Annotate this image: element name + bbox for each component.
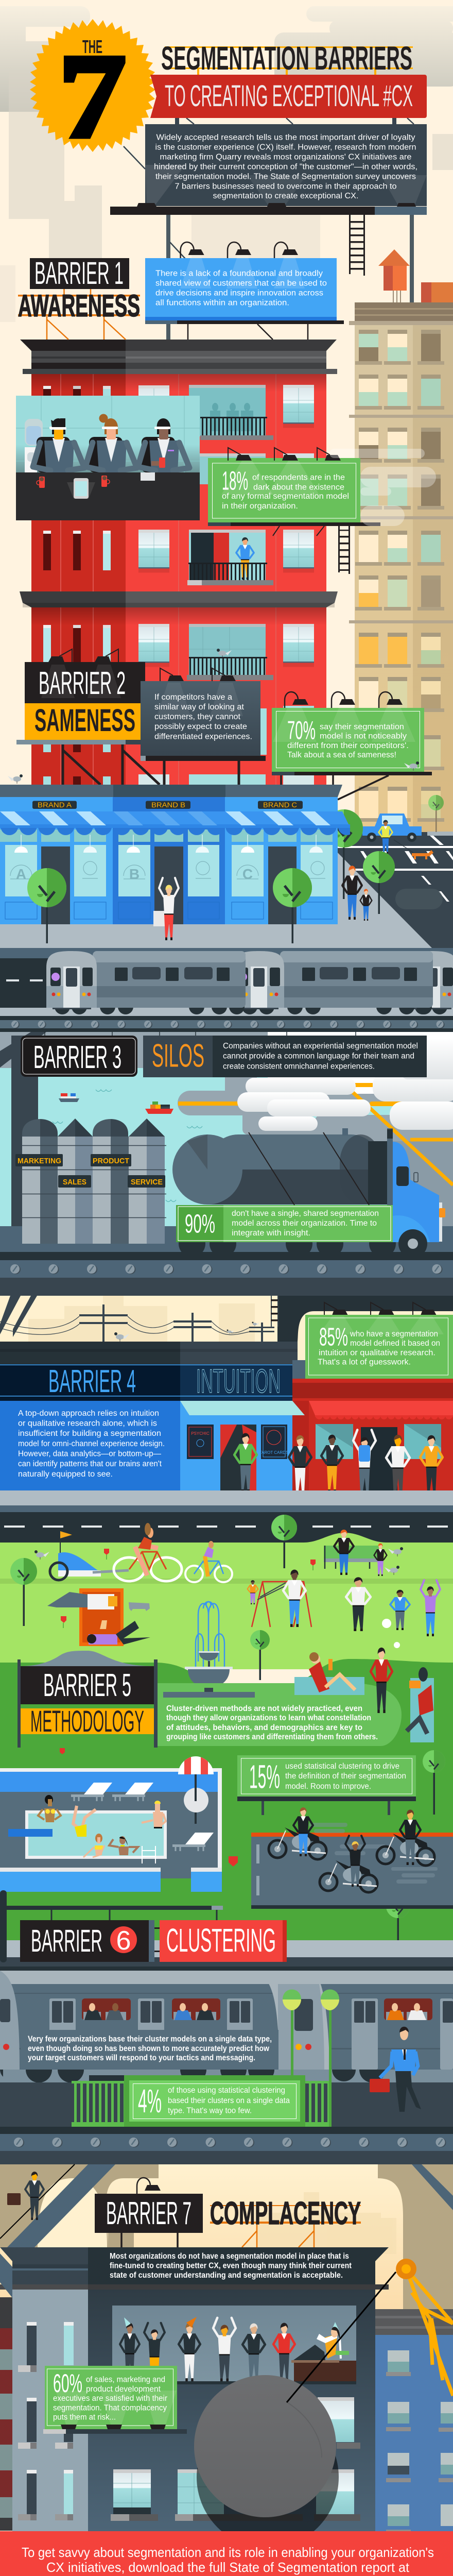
marketing label	[15, 1154, 63, 1166]
stat billboard: 70%	[272, 692, 432, 800]
clustering sign	[160, 1920, 287, 1962]
psychic poster	[187, 1425, 214, 1459]
barrier 5 text panel	[158, 1683, 402, 1746]
barrier 3 sign: BARRIER 3	[33, 1040, 121, 1075]
stat panel: 15%: the definition of their segmentation	[285, 1772, 406, 1781]
sales label: SALES	[63, 1178, 86, 1187]
barrier 6 text panel: your target customers will respond to your tactics and messaging.	[28, 2054, 255, 2062]
marketing label: MARKETING	[18, 1157, 61, 1165]
stat panel: 4%: of those using statistical clustering	[168, 2086, 285, 2095]
road and crossing	[0, 832, 453, 956]
stat billboard: 18%: in their organization.	[222, 502, 298, 511]
store roof and brand signs	[0, 785, 342, 811]
product label	[91, 1154, 131, 1166]
fountain	[185, 1602, 233, 1692]
wrecking ball shadow	[197, 2406, 339, 2548]
barrier 6 text panel: Very few organizations base their cluster models on a single data type,	[28, 2035, 272, 2043]
complacency building: fine-tuned to creating better CX, even though many think their current	[110, 2262, 352, 2270]
barrier 2 text billboard: If competitors have a	[154, 693, 232, 702]
brand A sign	[32, 801, 77, 809]
barrier 5 text panel: grouping like customers and differentiating them from others.	[166, 1733, 378, 1741]
barrier 2 text billboard: similar way of looking at	[154, 703, 245, 711]
intro billboard: 7 barriers businesses need to overcome in their approach to	[175, 182, 396, 191]
barrier 1 billboard: There is a lack of a foundational and broadly	[155, 269, 323, 278]
barrier 7 sign: BARRIER 7	[106, 2196, 191, 2231]
striped awning	[0, 811, 350, 836]
complacency sign: COMPLACENCY	[210, 2196, 361, 2231]
title: THE 7 starburst	[30, 19, 155, 163]
barrier 6 subway train	[0, 1971, 453, 2083]
tarot poster	[259, 1425, 288, 1459]
stat panel: 90%: model across their organization. Time to	[232, 1219, 377, 1228]
service label	[128, 1175, 165, 1188]
brand B sign	[146, 801, 190, 809]
sales label	[58, 1175, 91, 1188]
cyclists with trailer	[50, 1523, 232, 1582]
ships and waves	[53, 1090, 202, 1201]
stat billboard: 18%: of respondents are in the	[252, 473, 345, 482]
barrier 4 blue text panel: However, data analytics—or bottom-up—	[18, 1450, 161, 1458]
blindfolded executives	[33, 414, 189, 476]
crane	[396, 2259, 453, 2396]
stat panel: 60%	[43, 2366, 187, 2531]
red building windows and balconies	[43, 385, 314, 786]
barrier 3 sign	[21, 1036, 137, 1077]
barrier 6 street backdrop	[0, 1890, 453, 1971]
party guests	[120, 2318, 295, 2381]
barrier 4 blue text panel: A top-down approach relies on intuition	[18, 1409, 159, 1418]
silos panel: SILOS	[152, 1038, 204, 1074]
stat billboard: 70%: model is not noticeably	[320, 732, 407, 741]
reclining guest on desk	[293, 2327, 341, 2360]
stat panel: 60%: 60%	[53, 2369, 82, 2398]
blue car and dog walker	[362, 814, 433, 859]
barrier 2 sign: SAMENESS	[34, 703, 135, 738]
park trees	[10, 1515, 445, 1948]
stat panel: 15%	[237, 1755, 416, 1815]
intro billboard: hindered by their current conception of "the customer"—in other words,	[154, 162, 417, 171]
complacency building: Most organizations do not have a segmentation model in place that is	[110, 2252, 349, 2261]
barrier 1 billboard: all functions within an organization.	[155, 298, 289, 307]
stat panel: 4%: type. That's way too few.	[168, 2106, 252, 2115]
street skyline with utility poles	[0, 1296, 453, 1383]
barrier 2 sign: BARRIER 2	[39, 666, 126, 701]
stat panel: 60%: puts them at risk...	[53, 2413, 116, 2421]
barrier 1 sign: AWARENESS	[18, 289, 140, 323]
barrier 6 text panel: even though doing so has been shown to more accurately predict how	[28, 2044, 270, 2053]
lawn figures on blankets	[294, 1642, 434, 1742]
stat billboard: 18%	[208, 448, 380, 536]
barrier 2 sign	[16, 649, 160, 785]
water cooler	[25, 419, 43, 472]
fire ladder	[338, 526, 350, 574]
stat panel: 4%: 4%	[138, 2082, 162, 2120]
balcony man	[187, 537, 273, 585]
silos panel: create consistent omnichannel experiences.	[223, 1062, 375, 1071]
stat panel: 15%: 15%	[249, 1758, 280, 1795]
stat panel: 85%: 85%	[319, 1323, 348, 1351]
trees near the crossing	[325, 795, 444, 899]
commuter on the cable	[7, 2172, 44, 2220]
table items	[37, 472, 155, 499]
stat panel: 60%: segmentation. That complacency	[53, 2404, 167, 2412]
barrier 5 text panel: Cluster-driven methods are not widely practiced, even	[166, 1704, 362, 1713]
stat panel: 15%: model. Room to improve.	[285, 1782, 371, 1791]
right blue building	[375, 2309, 453, 2531]
silos panel: cannot provide a common language for their team and	[223, 1052, 414, 1060]
road smog clouds	[178, 1038, 453, 1185]
stat panel: 60%: product development	[86, 2385, 161, 2394]
building windows and ledges	[18, 2322, 360, 2521]
stat panel: 90%	[176, 1205, 393, 1242]
smog clouds	[0, 6, 453, 112]
businessman with briefcase	[370, 2027, 421, 2112]
stat billboard: 18%: of any formal segmentation model	[222, 492, 349, 501]
barrier 2 text billboard: customers, they cannot	[154, 713, 241, 721]
intro billboard	[110, 124, 427, 215]
dog by the blanket	[129, 1602, 150, 1611]
intro billboard: marketing firm Quarry reveals most organizations' CX initiatives are	[160, 152, 412, 161]
silos	[15, 1118, 166, 1244]
people outside the psychic	[234, 1430, 443, 1498]
barrier 3 scene backdrop	[0, 1020, 453, 1298]
umbrella and table	[178, 1754, 214, 1824]
stat panel: 60%: of sales, marketing and	[86, 2375, 165, 2384]
barrier 4 neon sign: BARRIER 4	[48, 1364, 136, 1399]
brand stores facade: A	[16, 866, 26, 882]
barrier 2 text billboard	[141, 668, 266, 785]
brand B sign: BRAND B	[151, 801, 185, 809]
pale city silhouette	[0, 70, 453, 322]
barrier 4 blue text panel	[0, 1401, 180, 1490]
platform, fence and green lamps	[0, 1990, 453, 2127]
barrier 5 sign: BARRIER 5	[43, 1668, 131, 1703]
brand stores facade: B	[129, 866, 140, 882]
tanker truck	[172, 1128, 445, 1258]
bench, swing and playing figures	[34, 1530, 440, 1636]
barrier 4 blue text panel: model for omni-channel experience design.	[18, 1439, 165, 1448]
brand A sign: BRAND A	[38, 801, 72, 809]
meeting room panel	[16, 396, 200, 520]
stat panel: 85%	[305, 1302, 453, 1383]
elevated road girder with bolts	[0, 1020, 453, 1296]
barrier 5 text panel: though they allow organizations to learn what constellation	[166, 1714, 371, 1722]
psychic store and red store	[0, 1342, 453, 1490]
tulips	[60, 1549, 316, 1874]
stat panel: 85%: who have a segmentation	[350, 1330, 438, 1338]
stat panel: 4%: based their clusters on a single data	[168, 2096, 290, 2105]
stat panel: 85%: model defined it based on	[350, 1339, 440, 1348]
barrier 1 billboard	[145, 242, 344, 340]
barrier 5 text panel: of attitudes, behaviors, and demographics are key to	[166, 1723, 362, 1732]
train window passengers	[82, 1998, 432, 2020]
stat billboard: 70%: 70%	[287, 716, 316, 745]
picnic blanket with people lying down	[47, 1588, 150, 1646]
pigeon on balcony and fourth-floor railing	[187, 649, 273, 680]
silos panel	[143, 1036, 427, 1077]
swimmers	[38, 1795, 166, 1863]
stat panel: 85%: That's a lot of guesswork.	[318, 1358, 411, 1366]
tarot poster: TAROT CARDS	[259, 1450, 288, 1455]
intro billboard: segmentation to create exceptional CX.	[213, 192, 358, 200]
complacency building	[0, 2247, 389, 2531]
barrier 1 sign: BARRIER 1	[34, 256, 124, 291]
stat billboard: 18%: dark about the existence	[253, 483, 344, 492]
water tower and rooftop box	[378, 249, 453, 302]
brand stores facade	[0, 827, 338, 924]
red building roof	[20, 340, 337, 374]
complacency building: state of customer understanding and segmentation is acceptable.	[110, 2271, 343, 2280]
brand stores facade: C	[242, 866, 253, 882]
subway tracks and train	[0, 948, 453, 1020]
psychic poster: PSYCHIC	[191, 1431, 210, 1436]
barrier 7 sky and arches	[0, 2164, 453, 2314]
swimming pool	[0, 1754, 222, 1892]
barrier 5 sign	[18, 1651, 158, 1748]
stat billboard: 70%: say their segmentation	[320, 723, 404, 732]
intro billboard: their segmentation model. The State of Segmentation survey uncovers	[155, 172, 416, 181]
barrier 4 blue text panel: naturally equipped to see.	[18, 1470, 113, 1479]
second girder with bolts	[0, 2127, 453, 2164]
call to action band	[0, 2531, 453, 2576]
billboard structure: poles, ladder and struts	[124, 118, 414, 340]
wrecking ball and cable	[194, 2272, 396, 2517]
stat panel: 85%: intuition or qualitative research.	[319, 1349, 435, 1357]
stat panel: 15%: used statistical clustering to drive	[285, 1762, 399, 1771]
title banner: To Creating Exceptional #CX	[150, 75, 427, 118]
intro billboard: is the customer experience (CX) itself. However, research from modern	[155, 143, 416, 151]
barrier 7 sign	[95, 2178, 203, 2247]
barrier 1 billboard: shared view of customers that can be used to	[155, 279, 327, 287]
pigeon on the store roof	[8, 774, 23, 784]
stat panel: 90%: 90%	[185, 1209, 215, 1239]
park lawn	[0, 1533, 453, 1953]
complacency sign	[210, 2196, 361, 2247]
barrier 4 blue text panel: can identify patterns that our brains aren't	[18, 1460, 162, 1468]
stat panel: 90%: integrate with insight.	[232, 1229, 310, 1238]
stat billboard: 70%: different from their competitors'.	[287, 741, 409, 750]
barrier 1 billboard: drive decisions and inspire innovation across	[155, 289, 323, 297]
mid cornice	[20, 591, 338, 607]
barrier 1 sign	[18, 256, 140, 340]
barrier 2 text billboard: possibly expect to create	[154, 722, 247, 731]
barrier 6 text panel	[21, 2030, 278, 2070]
barrier 6 sign: 6	[116, 1926, 131, 1956]
barrier 4 neon sign: INTUITION	[196, 1362, 281, 1400]
party room	[112, 2306, 356, 2384]
barrier 6 sign: BARRIER	[31, 1923, 102, 1958]
barrier 5 sign: METHODOLOGY	[30, 1705, 144, 1738]
service label: SERVICE	[131, 1178, 163, 1187]
beige building	[349, 302, 453, 836]
brand C sign: BRAND C	[263, 801, 297, 809]
motorcycle road	[251, 1823, 453, 1909]
barrier 4 blue text panel: insufficient for building a segmentation	[18, 1429, 161, 1438]
barrier 2 text billboard: differentiated experiences.	[154, 733, 252, 741]
silos panel: Companies without an experiential segmentation model	[223, 1042, 418, 1050]
stat panel: 60%: executives are satisfied with their	[53, 2394, 167, 2403]
loungers	[71, 1783, 214, 1851]
call to action band: CX initiatives, download the full State of Segmentation report at	[46, 2560, 410, 2575]
barrier 4 neon sign	[0, 1362, 292, 1401]
stat billboard: 70%: Talk about a sea of sameness!	[287, 751, 396, 759]
stat billboard: 18%: 18%	[222, 466, 248, 496]
title: THE 7 starburst: THE	[82, 36, 102, 57]
left neighbour building strip	[0, 2297, 12, 2531]
smoke drifting over the beige building	[329, 449, 436, 526]
shopper and street figures	[153, 866, 372, 940]
stat panel: 4%	[124, 2075, 305, 2127]
background: cream sky	[0, 0, 453, 1082]
clustering sign: CLUSTERING	[166, 1922, 276, 1959]
intro billboard: Widely accepted research tells us the most important driver of loyalty	[156, 133, 415, 142]
sidewalk and road	[0, 1490, 453, 1548]
brand C sign	[258, 801, 303, 809]
barrier 4 blue text panel: or qualitative research alone, which is	[18, 1419, 157, 1428]
title: THE 7 starburst: 7	[59, 30, 126, 163]
red building facade	[31, 374, 326, 786]
store-front trees	[27, 851, 395, 943]
product label: PRODUCT	[93, 1157, 129, 1165]
motorcycles and riders	[269, 1807, 434, 1892]
stat panel: 90%: don't have a single, shared segmentation	[232, 1209, 379, 1218]
